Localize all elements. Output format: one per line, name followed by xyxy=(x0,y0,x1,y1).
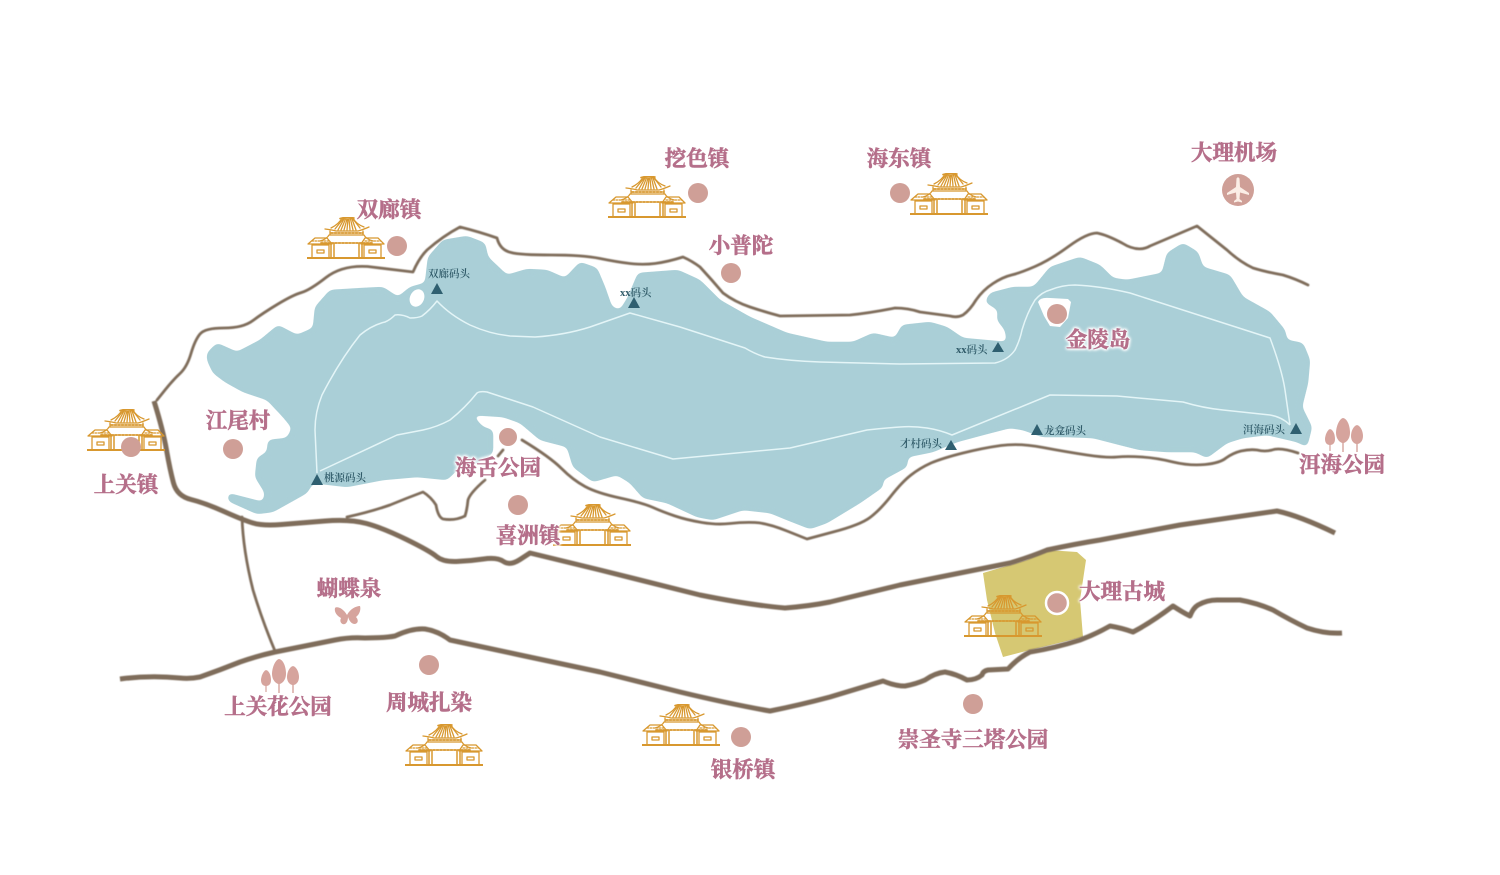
pier: 龙龛码头 xyxy=(1031,424,1087,437)
icon: temple xyxy=(608,176,686,217)
ferry route: north line xyxy=(315,285,1290,473)
road: lower thick highway xyxy=(120,600,1342,711)
road: west and north shore xyxy=(157,226,1308,400)
label: 小普陀 xyxy=(709,234,774,258)
label: 双廊镇 xyxy=(357,197,424,222)
marker xyxy=(498,427,518,447)
icon: trees xyxy=(1325,418,1363,452)
place: 挖色镇 xyxy=(608,146,732,217)
icon: temple xyxy=(642,704,720,745)
island 金陵岛 xyxy=(1038,298,1071,327)
place: 江尾村 xyxy=(206,409,271,459)
marker xyxy=(731,727,751,747)
place: 海东镇 xyxy=(867,146,988,214)
pier: 龙龛码头: 龙龛码头 xyxy=(1044,424,1087,437)
icon: butterfly xyxy=(335,606,360,624)
pier: 洱海码头 xyxy=(1243,423,1302,436)
pier: 桃源码头 xyxy=(311,471,367,485)
roads network xyxy=(120,226,1342,711)
pier: xx码头 east: xx码头 xyxy=(956,343,989,356)
label: 大理机场 xyxy=(1191,141,1277,165)
marker xyxy=(963,694,983,714)
label: 上关花公园 xyxy=(224,695,332,719)
label: 金陵岛 xyxy=(1066,328,1130,352)
pier: xx码头 north xyxy=(620,286,653,308)
label: 崇圣寺三塔公园 xyxy=(898,728,1048,752)
label: 银桥镇 xyxy=(711,757,778,782)
pier: 洱海码头: 洱海码头 xyxy=(1243,423,1286,436)
label: 喜洲镇 xyxy=(496,523,563,548)
place: 双廊镇 xyxy=(307,197,424,258)
marker xyxy=(121,437,141,457)
island near 双廊 xyxy=(407,287,427,309)
label: 挖色镇 xyxy=(665,146,732,171)
marker xyxy=(890,183,910,203)
icon: plane xyxy=(1227,177,1249,202)
place: 大理古城 xyxy=(964,580,1165,636)
place: 洱海公园 xyxy=(1299,418,1385,477)
place: 大理机场 xyxy=(1191,141,1277,206)
label: 江尾村 xyxy=(206,409,271,433)
label: 大理古城 xyxy=(1079,580,1165,604)
pier: 才村码头 xyxy=(900,437,957,450)
icon: temple xyxy=(307,217,385,258)
label: 海东镇 xyxy=(867,146,934,171)
marker xyxy=(721,263,741,283)
icon: trees xyxy=(261,659,299,693)
place: 金陵岛 xyxy=(1047,304,1130,352)
road: 海舌 peninsula xyxy=(347,480,485,520)
label: 蝴蝶泉 xyxy=(317,577,381,601)
place: 银桥镇 xyxy=(642,704,778,782)
place: 上关镇 xyxy=(87,409,165,497)
icon: temple xyxy=(964,595,1042,636)
place: 上关花公园 xyxy=(224,659,332,719)
pier: xx码头 east xyxy=(956,342,1004,356)
road: western thick section xyxy=(154,401,1335,608)
ferry piers xyxy=(311,267,1302,485)
marker xyxy=(688,183,708,203)
icon: temple xyxy=(553,504,631,545)
pier: 双廊码头 xyxy=(428,267,471,294)
marker with plane icon xyxy=(1222,174,1254,206)
label: 海舌公园 xyxy=(455,456,541,480)
place: 崇圣寺三塔公园 xyxy=(898,694,1048,752)
area: 大理古城 old town xyxy=(983,550,1086,657)
marker xyxy=(1046,592,1068,614)
icon: temple xyxy=(405,724,483,765)
marker xyxy=(1047,304,1067,324)
icon: temple xyxy=(910,173,988,214)
icon: temple xyxy=(87,409,165,450)
marker xyxy=(419,655,439,675)
label: 周城扎染 xyxy=(386,690,472,715)
place: 周城扎染 xyxy=(386,655,483,765)
pier: xx码头 north: xx码头 xyxy=(620,286,653,299)
road: south shore xyxy=(522,440,1298,539)
label: 洱海公园 xyxy=(1299,453,1385,477)
marker xyxy=(223,439,243,459)
marker xyxy=(508,495,528,515)
place: 蝴蝶泉 xyxy=(317,577,381,624)
marker xyxy=(387,236,407,256)
panel: lake Erhai water body xyxy=(207,236,1312,529)
ferry route: south line xyxy=(320,392,1290,471)
pier: 双廊码头: 双廊码头 xyxy=(428,267,471,280)
place: 小普陀 xyxy=(709,234,774,283)
road: link to lower highway xyxy=(242,517,275,651)
road: short section by 海舌 xyxy=(498,450,503,456)
place: 喜洲镇 xyxy=(496,495,631,548)
pier: 才村码头: 才村码头 xyxy=(900,437,943,450)
place: 海舌公园 xyxy=(455,427,541,480)
label: 上关镇 xyxy=(94,472,161,497)
pier: 桃源码头: 桃源码头 xyxy=(324,471,367,484)
